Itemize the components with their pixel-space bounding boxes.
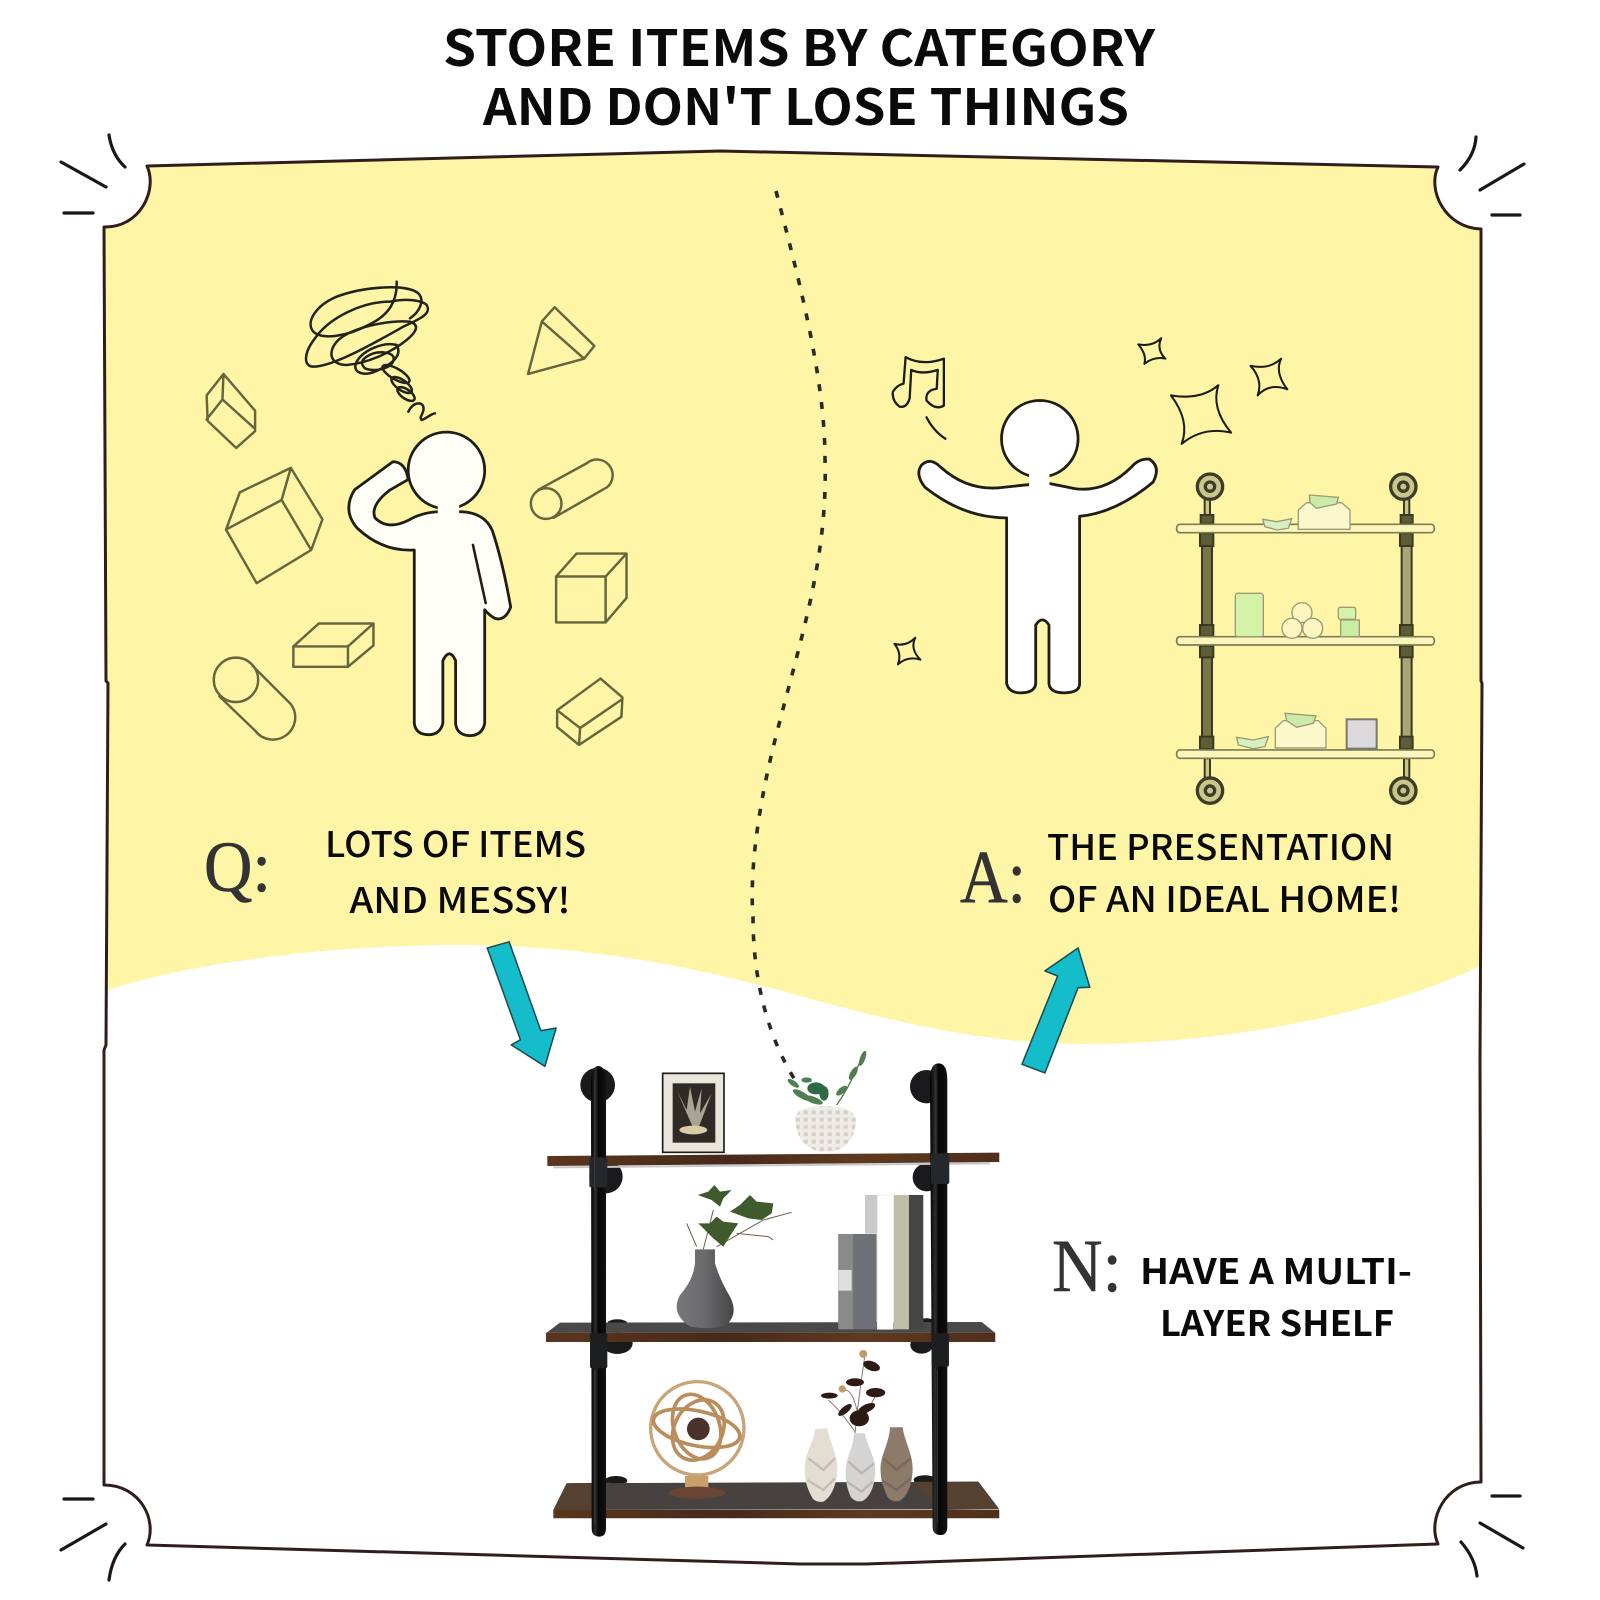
label: A text block: OF AN IDEAL HOME! — [1048, 872, 1401, 923]
person scratching head — [349, 432, 511, 736]
icon: small box bottom right — [557, 679, 622, 745]
happy person with raised arms — [919, 401, 1156, 693]
label: Q text block — [204, 817, 586, 924]
middle board — [546, 1322, 995, 1342]
title: AND DON'T LOSE THINGS — [482, 68, 1129, 140]
potted plant — [786, 1050, 868, 1152]
label: N text block — [1052, 1225, 1412, 1347]
label: A text block: THE PRESENTATION — [1047, 820, 1394, 871]
shelf items — [1235, 495, 1377, 749]
left iron pipe — [589, 1066, 607, 1537]
title: STORE ITEMS BY CATEGORY — [443, 9, 1156, 81]
bottom board — [553, 1482, 999, 1518]
label: Q text block: Q: — [204, 827, 271, 907]
icon: triangular prism — [528, 307, 594, 374]
label: N text block: HAVE A MULTI- — [1140, 1244, 1412, 1295]
icon: music notes — [893, 357, 945, 439]
scene: answer side person and items — [893, 338, 1287, 693]
icon: scribble above head — [306, 282, 435, 420]
icon: capsule bottom left — [214, 658, 295, 740]
scene: question side person and items — [207, 307, 627, 745]
shelf boards — [1177, 524, 1434, 758]
label: N text block: LAYER SHELF — [1160, 1296, 1394, 1347]
arrow: down to shelf — [487, 942, 556, 1066]
dashed divider curve — [752, 191, 825, 1080]
icon: cube right — [556, 554, 627, 622]
shelf uprights — [1200, 490, 1413, 785]
label: Q text block: LOTS OF ITEMS — [325, 817, 586, 868]
title — [443, 9, 1156, 140]
grey vase with branches — [677, 1185, 792, 1328]
frame outline with notched corners — [104, 151, 1482, 1564]
shelf flanges — [1197, 474, 1416, 803]
icon: small box — [207, 374, 255, 448]
label: Q text block: AND MESSY! — [350, 873, 570, 924]
three ceramic vases with dried flowers — [805, 1350, 913, 1502]
right iron pipe — [930, 1063, 949, 1535]
icon: cylinder top right — [531, 460, 613, 519]
photo frame — [663, 1073, 724, 1152]
panel: yellow background wave — [104, 151, 1481, 1044]
label: N text block: N: — [1052, 1225, 1122, 1308]
wall flanges — [580, 1068, 943, 1485]
icon: large cube — [226, 468, 322, 583]
top board — [547, 1153, 999, 1168]
books — [838, 1195, 923, 1329]
label: A text block: A: — [960, 836, 1026, 919]
arrow: up to answer — [1022, 948, 1090, 1073]
label: A text block — [960, 820, 1401, 923]
product: real wall shelf with decor — [546, 1050, 999, 1537]
icon: sketched three-tier shelf — [1177, 474, 1434, 803]
armillary sphere ornament — [650, 1382, 744, 1499]
icon: sparkles — [894, 338, 1287, 664]
icon: flat box — [293, 623, 373, 667]
